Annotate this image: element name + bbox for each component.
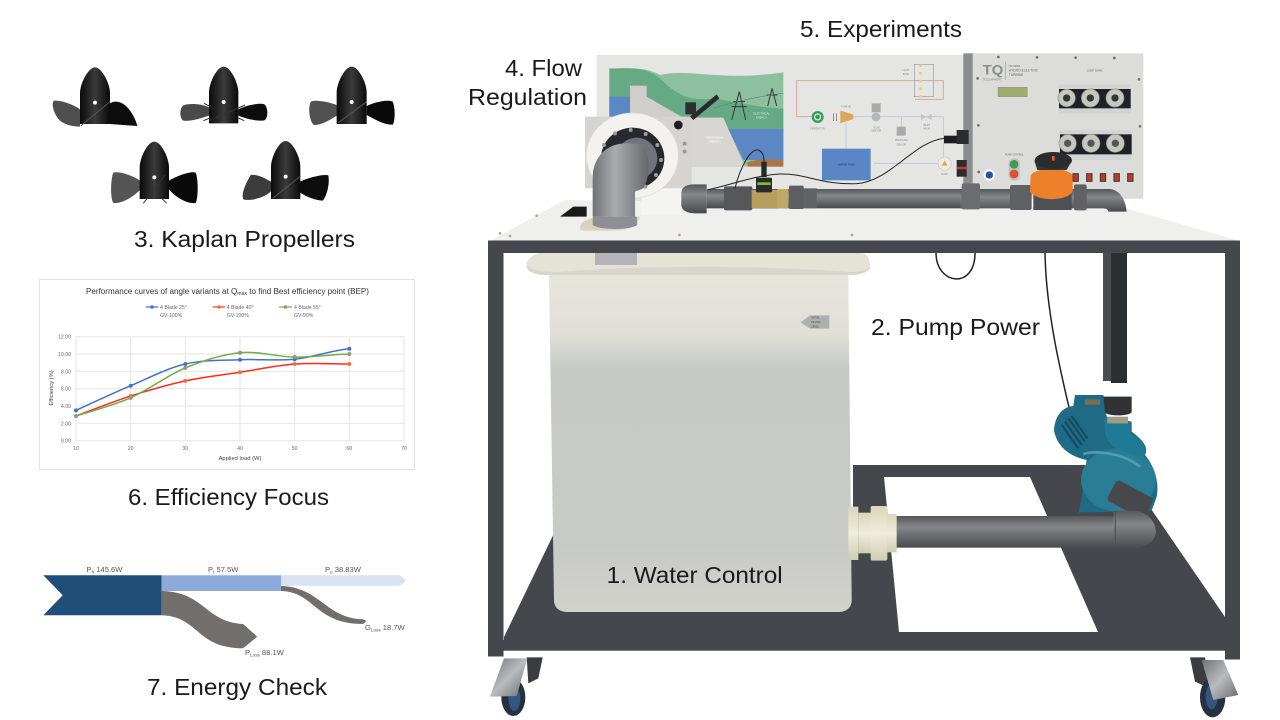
- sankey labels: P: [325, 565, 330, 574]
- lower shelf: [504, 465, 1225, 640]
- propeller 1: [53, 67, 137, 127]
- scene: hydro landscape: ELECTRICAL: [753, 111, 770, 115]
- sankey labels: h: [92, 570, 95, 574]
- pump control buttons: [1005, 154, 1024, 180]
- process schematic: INLET: [923, 125, 931, 127]
- heading: 1. Water Control: 1. Water Control: [607, 562, 783, 588]
- process schematic: SENSOR: [871, 131, 882, 133]
- process schematic: PUMP: [941, 174, 948, 176]
- brand block: TECQUIPMENT: [982, 77, 1002, 81]
- axis titles: Applied load (W): [219, 456, 261, 462]
- chart title: max: [237, 291, 247, 297]
- x axis ticks: 60: [346, 446, 352, 452]
- sankey labels: P: [245, 648, 250, 657]
- sankey labels: e: [330, 570, 333, 574]
- axis titles: [49, 370, 261, 462]
- right castor: [1190, 657, 1238, 717]
- heading: 2. Pump Power: 2. Pump Power: [871, 314, 1040, 340]
- sankey labels: G: [365, 623, 371, 632]
- horizontal pipe: [681, 184, 965, 213]
- control panel: [963, 53, 1143, 199]
- legend: 4 Blade 40°: [227, 305, 254, 311]
- legend: GV-90%: [294, 313, 314, 319]
- pipe elbow: [1113, 511, 1156, 548]
- light bank: [1058, 69, 1132, 160]
- elbow pipe: [593, 143, 649, 229]
- process schematic: FLOW: [873, 127, 880, 129]
- load switches: [1073, 174, 1133, 181]
- x axis ticks: 30: [182, 446, 188, 452]
- sankey labels: Loss: [371, 628, 381, 632]
- side connector: [944, 136, 958, 143]
- panel: Kaplan propellers: [53, 67, 395, 203]
- table cutouts: [499, 207, 853, 237]
- sankey labels: P: [86, 565, 92, 574]
- x axis ticks: 10: [73, 446, 79, 452]
- outlet pipe: [896, 516, 1116, 548]
- pump assembly: [848, 395, 1157, 561]
- mimic panel: [597, 55, 967, 202]
- fill level tag: INITIAL: [811, 317, 820, 320]
- process schematic: PRESSURE: [895, 140, 908, 142]
- table top: [490, 200, 1240, 241]
- sankey energy diagram: [43, 565, 406, 658]
- input power band: [43, 575, 162, 615]
- fill level tag: FILLING: [811, 321, 821, 324]
- left castor: [490, 657, 543, 716]
- series: 4 blade 25: [74, 347, 351, 412]
- sankey labels: 18.7W: [381, 623, 406, 632]
- y axis ticks: 2.00: [61, 421, 71, 427]
- heading: 4. Flow Regulation: 4. Flow: [505, 55, 582, 81]
- process schematic: [797, 64, 951, 180]
- x axis ticks: 50: [292, 446, 298, 452]
- chart title: Performance curves of angle variants at Q: [86, 286, 247, 296]
- panel screws: [976, 56, 1141, 173]
- machine: hydro electric turbine trainer: [488, 53, 1240, 717]
- valve and right pipework: [960, 152, 1127, 212]
- scene: hydro landscape: ENERGY: [756, 115, 768, 119]
- y axis ticks: 8.00: [61, 369, 71, 375]
- diaphragm valve: [1030, 152, 1073, 210]
- legend: GV-100%: [160, 313, 183, 319]
- axis titles: Efficiency (%): [49, 370, 55, 406]
- sankey labels: 38.83W: [333, 565, 362, 574]
- turbine housing and top pipework: [585, 94, 969, 229]
- heading: 3. Kaplan Propellers: 3. Kaplan Propellers: [134, 226, 355, 252]
- pump control buttons: PUMP CONTROL: [1005, 154, 1024, 156]
- brass flow sensor: [752, 162, 788, 208]
- sankey labels: Loss: [250, 652, 260, 658]
- x axis ticks: 70: [401, 446, 407, 452]
- legend: [146, 305, 321, 319]
- process schematic: WATER TANK: [838, 163, 855, 167]
- sensor cables: [708, 138, 944, 190]
- legend: GV-100%: [227, 313, 249, 319]
- scene: hydro landscape: MECHANICAL: [706, 135, 724, 139]
- sensor and actuator: [674, 94, 719, 154]
- sankey labels: P: [208, 565, 213, 574]
- propeller 4: [111, 142, 198, 203]
- light bank: LIGHT BANK: [1087, 69, 1103, 73]
- turbine power band: [162, 575, 281, 591]
- brand block: HYDRO ELECTRIC: [1009, 68, 1039, 72]
- y axis ticks: 4.00: [61, 404, 71, 410]
- y axis ticks: 6.00: [61, 387, 71, 393]
- x axis ticks: 20: [128, 446, 134, 452]
- brand block: [982, 61, 1039, 81]
- logo badge: [984, 169, 995, 181]
- chart: performance curves: [40, 280, 414, 470]
- process schematic: GENERATOR: [810, 128, 825, 131]
- process schematic: SENSOR: [896, 144, 907, 146]
- scene: hydro landscape: ENERGY: [709, 140, 721, 144]
- legend: 4 Blade 25°: [160, 305, 187, 311]
- power loss flow: [162, 591, 257, 648]
- pump body: [1054, 395, 1157, 519]
- series: 4 blade 40: [76, 362, 351, 416]
- series: 4 blade 55: [74, 351, 351, 418]
- propeller 3: [309, 67, 395, 125]
- water tank: [527, 253, 870, 612]
- sankey labels: [86, 565, 406, 658]
- sankey labels: t: [213, 570, 215, 574]
- brand block: TQ: [983, 61, 1003, 77]
- heading: 4. Flow Regulation: Regulation: [468, 84, 587, 110]
- output power arrow: [281, 575, 406, 586]
- sankey labels: 57.5W: [214, 565, 239, 574]
- generator loss flow: [281, 586, 367, 624]
- heading: 4. Flow Regulation: [468, 55, 587, 110]
- sankey labels: 145.6W: [94, 565, 123, 574]
- y axis ticks: [58, 335, 71, 445]
- process schematic: VALVE: [923, 128, 931, 131]
- propeller 2: [180, 67, 267, 123]
- chart title: to find Best efficiency point (BEP): [247, 286, 369, 296]
- x axis ticks: [73, 446, 407, 452]
- scene: hydro landscape: [609, 68, 783, 167]
- fill level tag: LEVEL: [811, 325, 820, 328]
- y axis ticks: 12.00: [58, 335, 71, 341]
- cream union fitting: [848, 506, 897, 561]
- process schematic: TURBINE: [841, 107, 852, 109]
- brand block: TURBINE: [1009, 73, 1024, 77]
- turbine casing: [585, 113, 692, 215]
- LCD display: [998, 87, 1027, 97]
- heading: 5. Experiments: 5. Experiments: [800, 16, 962, 42]
- fill level tag: [801, 315, 829, 329]
- legend: 4 Blade 55°: [294, 305, 321, 311]
- y axis ticks: 0.00: [61, 439, 71, 445]
- right pipe run: [960, 189, 1127, 212]
- rear return pipe and cables: [936, 253, 1127, 420]
- process schematic: LIGHT: [903, 70, 910, 72]
- process schematic: BANK: [903, 73, 910, 76]
- brand block: HD 300W: [1009, 64, 1021, 68]
- propeller 5: [243, 141, 329, 201]
- x axis ticks: 40: [237, 446, 243, 452]
- heading: 7. Energy Check: 7. Energy Check: [147, 674, 328, 700]
- sankey labels: 88.1W: [260, 648, 285, 657]
- heading: 6. Efficiency Focus: 6. Efficiency Focus: [128, 484, 329, 510]
- frame: [488, 240, 1240, 660]
- y axis ticks: 10.00: [58, 352, 71, 358]
